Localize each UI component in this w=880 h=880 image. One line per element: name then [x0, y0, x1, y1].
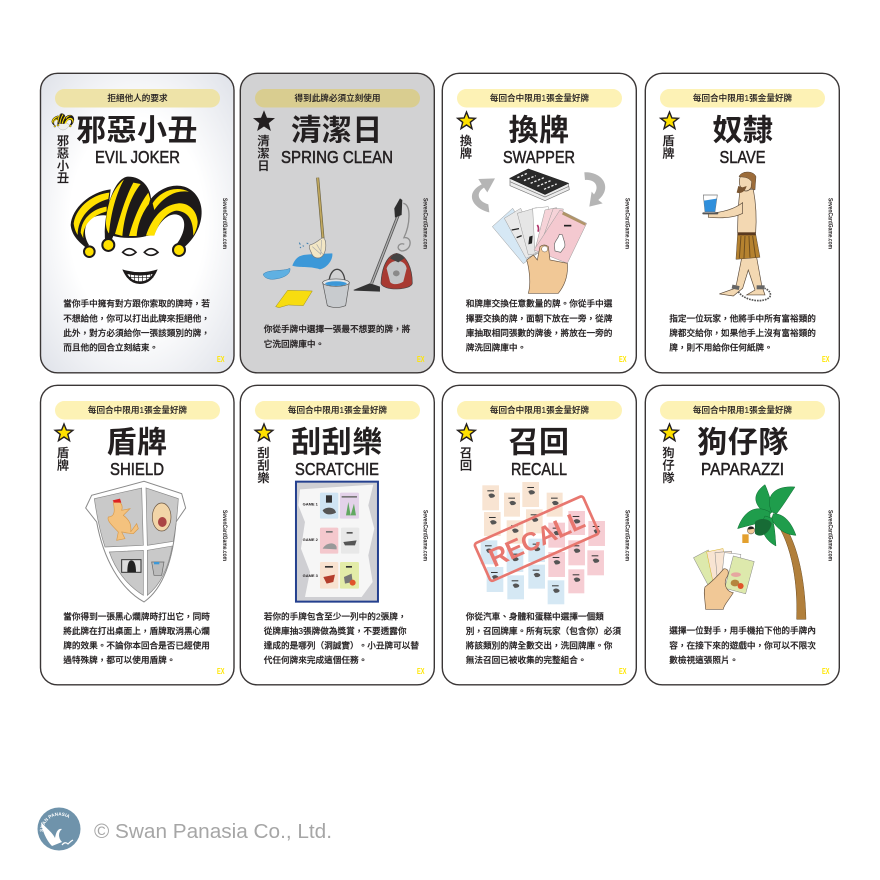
rule text: 牌，則不用給你任何紙牌。: [669, 342, 773, 352]
rule text: 你從手牌中選擇一張最不想要的牌，將: [264, 323, 411, 334]
rule text: 過特殊牌，都可以使用盾牌。: [63, 654, 175, 665]
card background: [240, 385, 434, 685]
side label: 丑: [57, 171, 69, 185]
card: spring clean: [240, 73, 434, 373]
side label: 仔: [662, 458, 675, 472]
rule text: 你從汽車、身體和蛋糕中選擇一個類: [466, 610, 604, 622]
website: SevenCardGame.com: [221, 198, 227, 249]
side label: 召: [460, 446, 472, 460]
usage pill: 每回合中限用1張金量好牌: [288, 404, 388, 415]
illustration: scratch card: GAME 3: [303, 573, 319, 578]
usage pill: [255, 401, 420, 420]
usage pill: 每回合中限用1張金量好牌: [693, 92, 793, 103]
illustration: mop, bucket, vacuum: [263, 178, 412, 308]
website: SevenCardGame.com: [827, 198, 833, 249]
usage pill: [255, 89, 420, 108]
side label: 盾: [662, 134, 675, 148]
card: shield: [40, 385, 234, 685]
side label: 潔: [257, 145, 270, 160]
title: 奴隸: [712, 114, 774, 148]
card: scratchie: [240, 385, 434, 685]
illustration: jester face: [71, 177, 202, 284]
title: 盾牌: [106, 426, 168, 460]
illustration: recalled cards with stamp: RECALL: [484, 504, 589, 573]
illustration: palm tree and hand of cards: [694, 485, 806, 619]
website: SevenCardGame.com: [624, 198, 630, 249]
side label: 樂: [257, 470, 270, 485]
rule text: 而且他的回合立刻結束。: [63, 342, 158, 352]
usage pill: 得到此牌必須立刻使用: [295, 92, 380, 103]
side label: 回: [460, 458, 472, 472]
expansion mark: EX: [417, 667, 425, 676]
rule text: 庫抽取相同張數的牌後，將放在一旁的: [466, 327, 613, 338]
card background: [40, 385, 234, 685]
website: SevenCardGame.com: [422, 198, 428, 249]
english title: SWAPPER: [503, 147, 575, 167]
usage pill: [457, 89, 622, 108]
icon: yellow star: [661, 424, 678, 441]
title: 刮刮樂: [291, 426, 383, 460]
illustration: shield: [86, 481, 186, 602]
side label: 日: [257, 159, 270, 173]
rule text: 它洗回牌庫中。: [264, 338, 324, 349]
rule text: 選擇一位對手，用手機拍下他的手牌內: [669, 624, 816, 636]
rule text: 和牌庫交換任意數量的牌。你從手中選: [466, 298, 613, 308]
card background: [442, 73, 636, 373]
illustration: swapping cards: [472, 169, 605, 293]
icon: yellow star: [458, 424, 475, 441]
rule text: 牌洗回牌庫中。: [466, 342, 526, 352]
english title: RECALL: [511, 459, 567, 479]
card background: [40, 73, 234, 373]
expansion mark: EX: [417, 355, 425, 364]
icon: yellow star: [55, 424, 73, 441]
rule text: 不想給他，你可以打出此牌來拒絕他，: [63, 312, 210, 324]
rule text: 代任何牌來完成這個任務。: [264, 654, 367, 665]
usage pill: [55, 401, 220, 420]
illustration: scratch card: GAME 2: [303, 537, 319, 542]
card background: [240, 73, 434, 373]
illustration: recalled cards with stamp: [474, 482, 605, 604]
usage pill: 每回合中限用1張金量好牌: [693, 404, 793, 415]
icon: yellow star: [255, 424, 273, 441]
expansion mark: EX: [619, 667, 627, 676]
rule text: 達成的是哪列（洞誠實）。小丑牌可以替: [264, 640, 419, 650]
rule text: 擇要交換的牌，面朝下放在一旁，從牌: [466, 312, 613, 324]
website: SevenCardGame.com: [422, 510, 428, 561]
side label: 牌: [57, 457, 69, 472]
icon: black star: [253, 110, 275, 131]
side label: 牌: [662, 145, 675, 160]
card background: [645, 73, 839, 373]
website: SevenCardGame.com: [221, 510, 227, 561]
title: 邪惡小丑: [76, 114, 198, 148]
rule text: 無法召回已被收集的完整組合。: [466, 654, 586, 665]
english title: PAPARAZZI: [701, 459, 784, 479]
rule text: 從牌庫抽3張牌做為獎賞，不要透露你: [264, 625, 407, 636]
rule text: 牌的效果。不論你本回合是否已經使用: [63, 640, 210, 650]
side label: 隊: [662, 471, 675, 485]
expansion mark: EX: [822, 667, 830, 676]
side label: 邪: [57, 134, 69, 148]
usage pill: 拒絕他人的要求: [107, 92, 168, 103]
rule text: 指定一位玩家，他將手中所有富裕類的: [669, 312, 816, 324]
title: 狗仔隊: [697, 426, 789, 460]
footer logo: [38, 808, 80, 850]
icon: yellow star: [661, 112, 678, 129]
rule text: 別，召回牌庫。所有玩家（包含你）必須: [466, 625, 621, 636]
website: SevenCardGame.com: [624, 510, 630, 561]
rule text: 此外，對方必須給你一張該類別的牌，: [63, 327, 210, 338]
illustration: scratch card: [296, 482, 378, 602]
usage pill: 每回合中限用1張金量好牌: [490, 92, 590, 103]
usage pill: [457, 401, 622, 420]
english title: SPRING CLEAN: [281, 147, 393, 167]
expansion mark: EX: [619, 355, 627, 364]
side label: 牌: [460, 145, 472, 160]
side label: 小: [57, 159, 69, 173]
side label: 惡: [57, 146, 69, 160]
rule text: 容，在接下來的遊戲中，你可以不限次: [669, 640, 816, 650]
expansion mark: EX: [217, 355, 225, 364]
title: 清潔日: [291, 114, 383, 148]
expansion mark: EX: [217, 667, 225, 676]
illustration: slave with jug: [702, 172, 770, 301]
side label: 換: [460, 133, 472, 148]
card: slave: [645, 73, 839, 373]
rule text: 牌都交給你，如果他手上沒有富裕類的: [669, 327, 816, 338]
copyright text: © Swan Panasia Co., Ltd.: [94, 821, 332, 843]
title: 召回: [508, 426, 570, 460]
card background: [645, 385, 839, 685]
website: SevenCardGame.com: [827, 510, 833, 561]
english title: SLAVE: [720, 147, 766, 167]
rule text: 將該類別的牌全數交出，洗回牌庫。你: [466, 640, 613, 650]
card: swapper: [442, 73, 636, 373]
icon: yellow star: [458, 112, 475, 129]
illustration: scratch card: GAME 1: [303, 502, 319, 507]
usage pill: 每回合中限用1張金量好牌: [88, 404, 188, 415]
usage pill: [660, 401, 825, 420]
side label: 狗: [662, 445, 675, 460]
usage pill: 每回合中限用1張金量好牌: [490, 404, 590, 415]
title: 換牌: [508, 114, 570, 148]
card: paparazzi: [645, 385, 839, 685]
rule text: 當你得到一張黑心爛牌時打出它，同時: [63, 610, 210, 622]
rule text: 當你手中擁有對方跟你索取的牌時，若: [63, 298, 210, 308]
side label: 盾: [57, 446, 69, 460]
rule text: 數檢視這張照片。: [669, 654, 738, 665]
card: recall: [442, 385, 636, 685]
english title: EVIL JOKER: [95, 147, 180, 167]
side label: 清: [257, 133, 270, 148]
side label: 刮: [257, 446, 270, 460]
side label: 刮: [257, 458, 270, 472]
rule text: 若你的手牌包含至少一列中的2張牌，: [264, 610, 407, 622]
usage pill: [660, 89, 825, 108]
english title: SCRATCHIE: [295, 459, 379, 479]
card background: [442, 385, 636, 685]
english title: SHIELD: [110, 459, 164, 479]
card: evil joker: [40, 73, 234, 373]
expansion mark: EX: [822, 355, 830, 364]
footer logo: SWAN PANASIA: [40, 812, 70, 832]
rule text: 將此牌在打出桌面上，盾牌取消黑心爛: [63, 625, 210, 636]
usage pill: [55, 89, 220, 108]
small joker icon: [52, 113, 74, 130]
